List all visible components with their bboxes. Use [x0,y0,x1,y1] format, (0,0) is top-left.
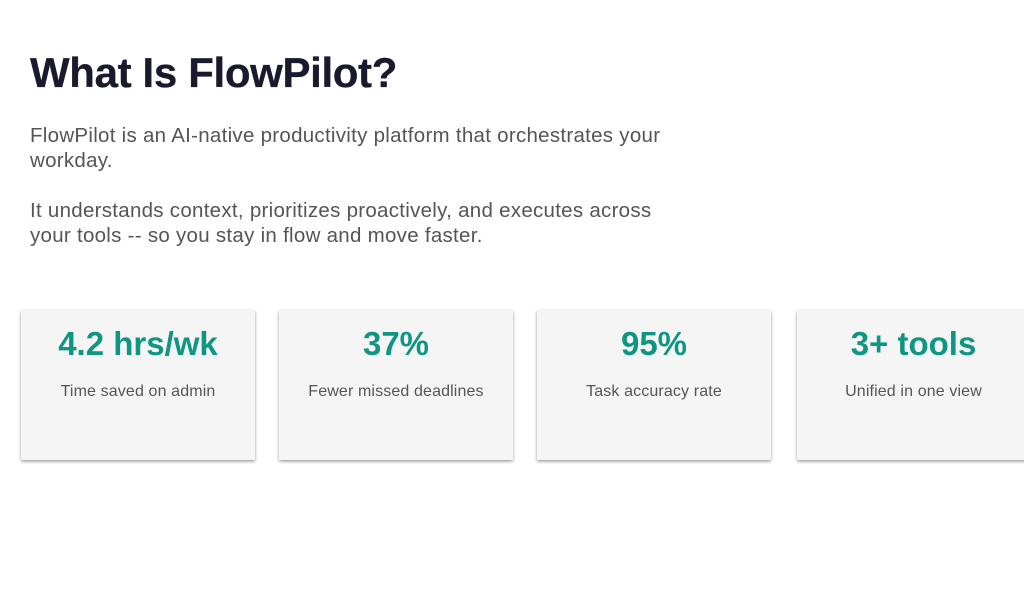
text block: second paragraph [30,199,651,247]
panel: missed deadlines stat card [279,310,513,460]
stat value: 3+ tools: 3+ tools [851,324,976,362]
stat value: 95%: 95% [621,324,687,362]
text block: intro paragraph [30,124,660,172]
stat value: 4.2 hrs/wk: 4.2 hrs/wk [58,324,218,362]
text block: second paragraph: your tools -- so you stay in flow and move faster. [30,224,483,247]
panel: tools stat card [796,310,1024,460]
stat label: unified tools: Unified in one view [845,382,982,400]
stat value: 37%: 37% [363,324,429,362]
panel: time saved stat card [21,310,255,460]
stat label: accuracy: Task accuracy rate [586,382,722,400]
text block: intro paragraph: workday. [30,149,113,172]
stat label: missed deadlines: Fewer missed deadlines [308,382,484,400]
stat label: time saved: Time saved on admin [61,382,215,400]
title: What Is FlowPilot? [30,49,397,96]
text block: second paragraph: It understands context, prioritizes proactively, and executes across [30,199,651,222]
panel: accuracy stat card [537,310,771,460]
text block: intro paragraph: FlowPilot is an AI-native productivity platform that orchestrates your [30,124,660,147]
